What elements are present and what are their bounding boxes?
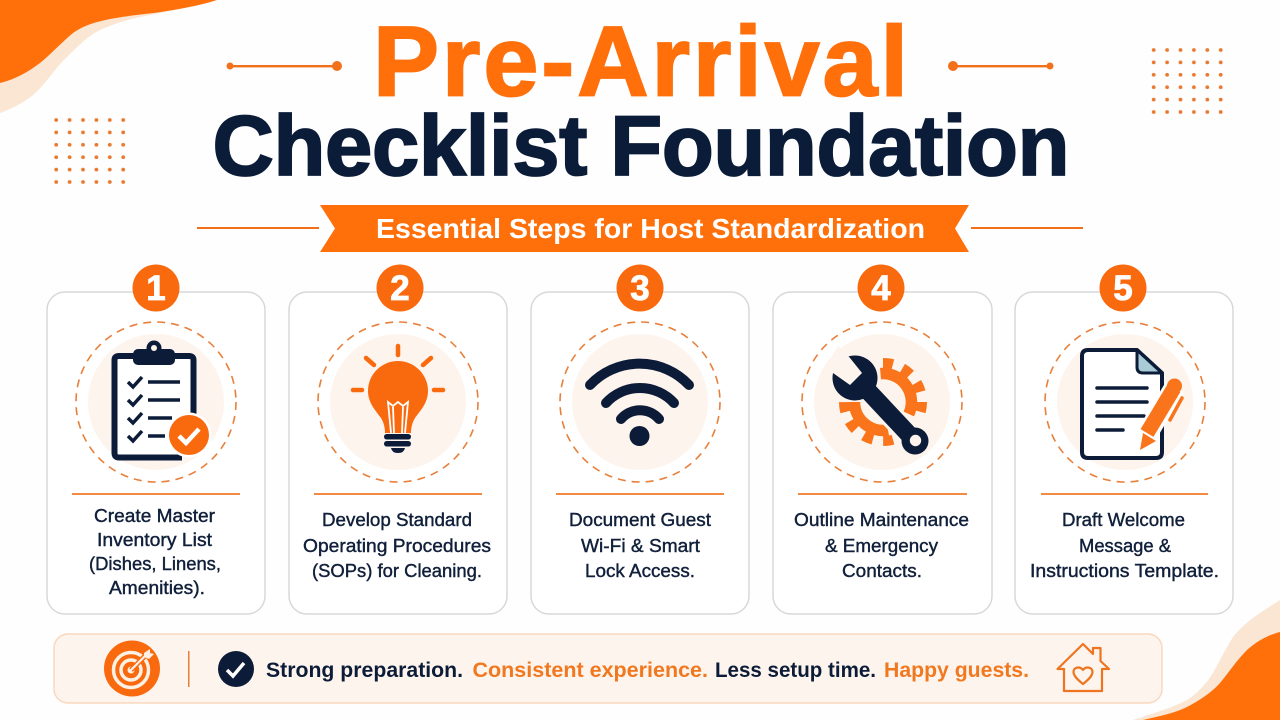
step 1 text <box>89 506 221 598</box>
subtitle ribbon: Essential Steps for Host Standardization <box>376 213 925 244</box>
step 4 text <box>794 510 969 581</box>
step 4 text: Contacts. <box>842 561 922 581</box>
step 5 text: Message & <box>1079 536 1171 556</box>
step number 3 <box>616 264 664 312</box>
step 4 text: & Emergency <box>825 536 938 556</box>
panel: step 5 <box>1015 264 1233 614</box>
step 3 text: Document Guest <box>569 510 711 530</box>
step number 4 <box>858 264 904 312</box>
step 2 text: Operating Procedures <box>303 536 491 556</box>
footer message: Happy guests. <box>884 658 1029 682</box>
icon: wrench and gear <box>826 346 928 454</box>
step 1 text: Inventory List <box>97 530 212 550</box>
step 4 text: Outline Maintenance <box>794 510 969 530</box>
footer message: Less setup time. <box>715 658 876 682</box>
icon: wifi <box>590 364 689 446</box>
title line 1: Pre-Arrival <box>373 6 908 116</box>
step number 5 <box>1100 264 1146 312</box>
icon: light bulb <box>353 346 443 453</box>
step number 4: 4 <box>871 269 891 308</box>
step 5 text: Instructions Template. <box>1030 561 1219 581</box>
step 2 text: (SOPs) for Cleaning. <box>312 561 482 581</box>
icon: document and pen <box>1082 350 1182 458</box>
title accent line: left <box>226 61 342 71</box>
step number 3: 3 <box>630 269 650 308</box>
icon: target <box>104 640 160 696</box>
footer message <box>266 658 1029 682</box>
icon: house with heart <box>1058 644 1109 691</box>
panel: step 3 <box>531 264 749 614</box>
subtitle ribbon <box>197 205 1083 252</box>
footer message: Strong preparation. <box>266 658 463 682</box>
step 2 text <box>303 510 491 581</box>
panel: step 4 <box>773 264 992 614</box>
step 5 text: Draft Welcome <box>1062 510 1185 530</box>
step 3 text <box>569 510 711 581</box>
panel: step 2 <box>289 264 507 614</box>
step 2 text: Develop Standard <box>322 510 472 530</box>
step number 5: 5 <box>1113 269 1133 308</box>
step 5 text <box>1030 510 1219 581</box>
step 3 text: Wi-Fi & Smart <box>581 536 700 556</box>
icon: clipboard with checklist <box>114 340 212 458</box>
step 1 text: (Dishes, Linens, <box>89 554 221 574</box>
panel: step 1 <box>47 264 265 614</box>
step number 1: 1 <box>146 269 166 308</box>
step number 2 <box>376 264 424 312</box>
footer message: Consistent experience. <box>472 658 708 682</box>
decorative wave: top left <box>0 0 217 113</box>
panel: footer banner <box>54 634 1162 703</box>
step 3 text: Lock Access. <box>585 561 695 581</box>
title line 2: Checklist Foundation <box>212 99 1070 194</box>
dot grid: left <box>50 114 130 188</box>
dot grid: right <box>1147 44 1227 118</box>
title accent line: right <box>948 61 1054 71</box>
decorative wave: bottom right <box>1133 600 1280 720</box>
step 1 text: Amenities). <box>109 578 205 598</box>
step 1 text: Create Master <box>94 506 215 526</box>
step number 2: 2 <box>390 269 410 308</box>
step number 1 <box>132 264 180 312</box>
icon: check badge <box>218 651 254 687</box>
